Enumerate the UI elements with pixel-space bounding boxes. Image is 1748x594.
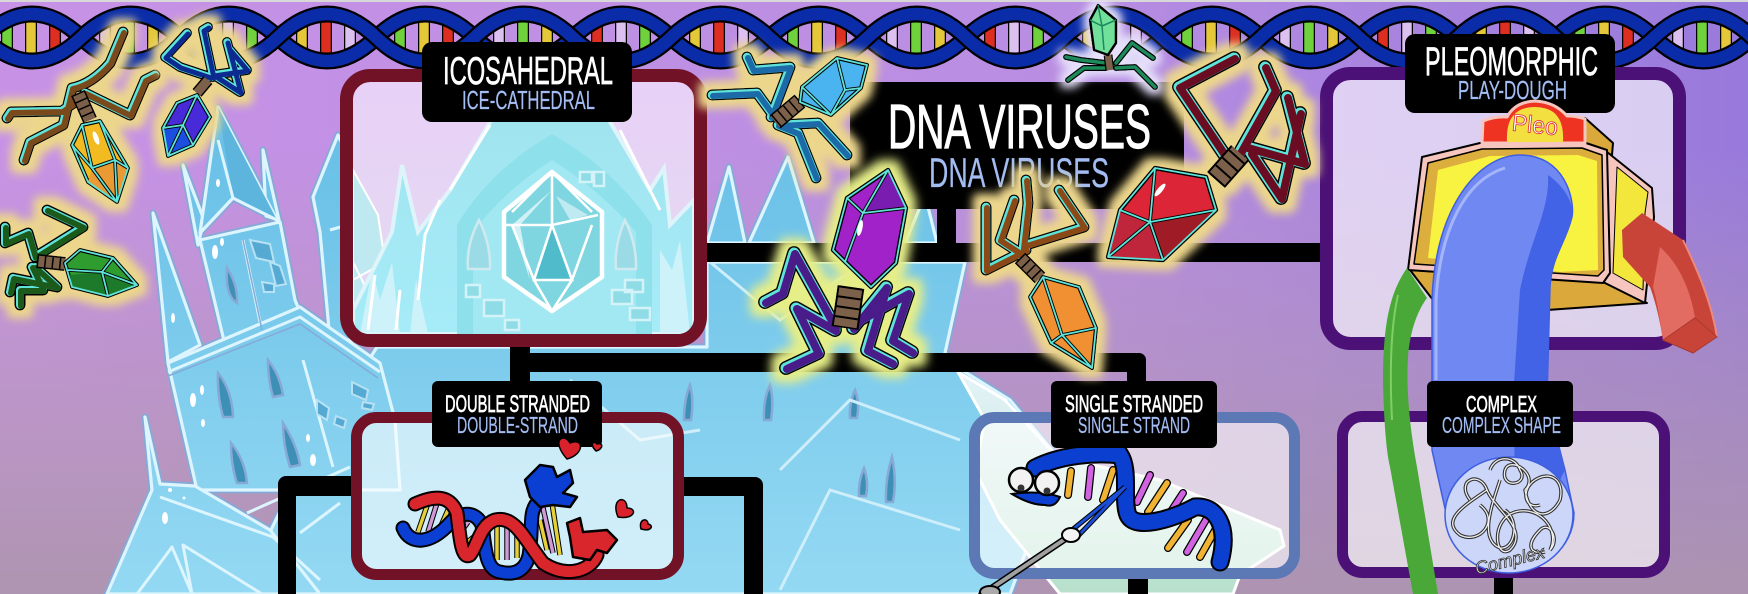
DNA helix border <box>0 14 1748 61</box>
illustration: extruded red dough <box>1622 213 1717 353</box>
virus: small green phage <box>1066 5 1155 87</box>
heading: complex label: COMPLEX <box>1466 391 1537 417</box>
blue kissing head <box>525 465 577 507</box>
illustration: play-dough press machine <box>1408 118 1654 310</box>
heading: double stranded label: DOUBLE STRANDED <box>445 391 590 418</box>
icon: red hearts <box>559 438 651 530</box>
heading: single stranded label: SINGLE STRANDED <box>1065 391 1203 418</box>
heading: pleomorphic label: PLAY-DOUGH <box>1458 75 1567 105</box>
heading: pleomorphic label: PLEOMORPHIC <box>1425 40 1598 84</box>
panel: single stranded <box>974 418 1294 594</box>
heading: double stranded label: DOUBLE-STRAND <box>457 412 578 438</box>
illustration: ice cathedral facade <box>353 122 694 334</box>
virus: yellow phage <box>7 32 156 202</box>
heading: complex label <box>1427 381 1573 447</box>
illustration: complex scribble capsid <box>1445 457 1573 579</box>
illustration: blue dough tube <box>1432 155 1574 572</box>
icon: icosahedron <box>504 172 602 311</box>
heading: single stranded label: SINGLE STRAND <box>1078 412 1190 438</box>
panel: icosahedral ice cathedral <box>346 76 700 340</box>
illustration: single strand with eyes and tweezers <box>980 454 1223 594</box>
castle windows <box>218 268 895 502</box>
machine body <box>1408 118 1654 310</box>
heading: double stranded label <box>432 381 602 447</box>
virus: blue-purple phage <box>163 27 248 156</box>
castle highlights <box>162 179 316 524</box>
panel: pleomorphic <box>1326 74 1680 344</box>
tweezers and stick <box>980 537 1068 594</box>
virus: sky blue phage <box>712 57 867 179</box>
snow mound <box>958 372 1284 594</box>
illustration: double stranded DNA couple <box>403 465 617 573</box>
virus: orange phage <box>986 180 1096 368</box>
heading: icosahedral label: ICOSAHEDRAL <box>443 50 613 93</box>
heading: icosahedral label: ICE-CATHEDRAL <box>462 85 595 115</box>
heading: DNA viruses label box <box>850 82 1184 209</box>
heading: pleomorphic label <box>1405 34 1615 113</box>
black connector lines <box>278 205 1513 594</box>
ice cathedral castle background <box>107 107 1060 594</box>
heading: complex label: COMPLEX SHAPE <box>1442 412 1561 438</box>
virus: red phage <box>1108 58 1305 260</box>
heading: single stranded label <box>1051 381 1217 448</box>
heading: icosahedral label <box>422 42 632 122</box>
heading: DNA viruses label box: DNA VIRUSES <box>929 149 1109 196</box>
castle bricks <box>250 240 374 428</box>
illustration: complex scribble capsid: Complex <box>1473 542 1548 579</box>
virus: purple phage <box>765 170 913 369</box>
panel: complex <box>1342 416 1664 572</box>
panel: double stranded <box>356 418 678 574</box>
illustration: green dough strand <box>1383 268 1438 594</box>
eyes <box>1012 493 1060 506</box>
red kissing head <box>567 518 617 560</box>
icon: Pleo sign: Pleo <box>1511 110 1559 141</box>
heading: DNA viruses label box: DNA VIRUSES <box>888 93 1151 162</box>
virus: green phage <box>5 210 137 306</box>
icon: Pleo sign <box>1482 101 1585 143</box>
